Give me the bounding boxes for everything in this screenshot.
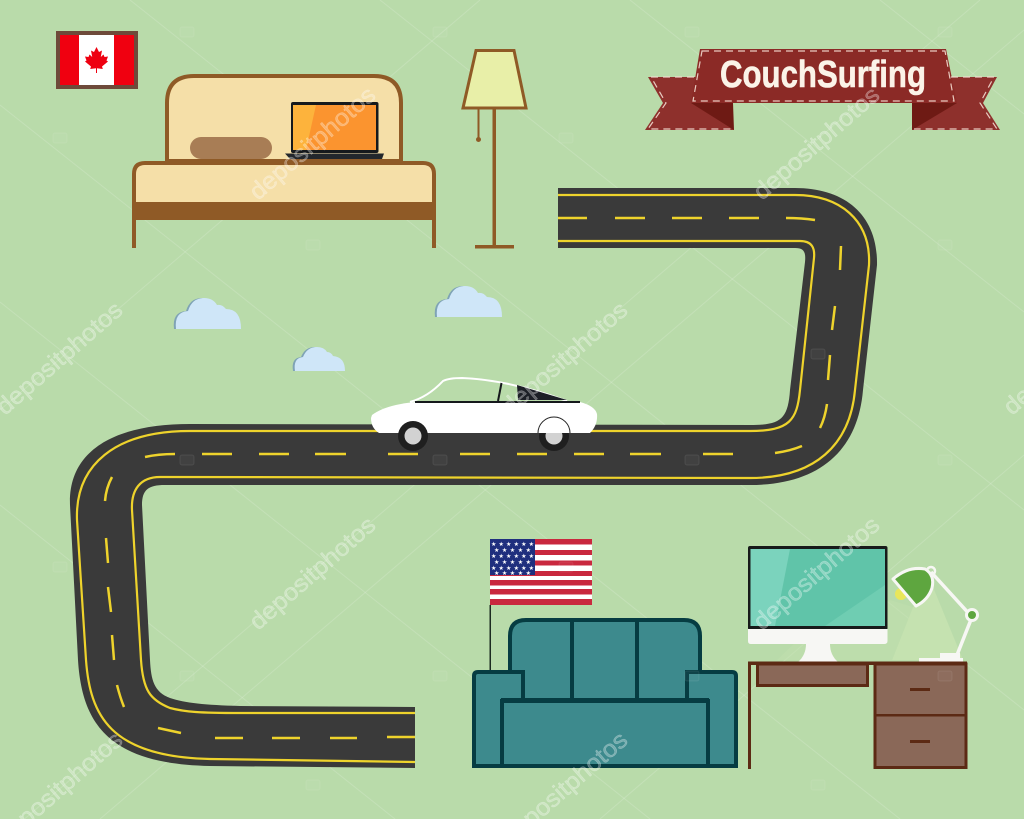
watermarks: depositphotos [244,81,381,206]
cloud right [435,286,502,317]
watermarks: depositphotos [244,511,381,636]
desk top [748,662,967,665]
watermarks: depositphotos [748,511,885,636]
sofa back [510,620,700,700]
flag: USA [490,539,592,671]
light cone [892,587,963,660]
car roof [410,378,567,402]
road [70,188,877,768]
ribbon left tail [645,77,734,130]
car pillar [498,383,502,401]
car rear window [517,385,567,400]
headboard [167,76,401,161]
watermarks: depositphotos [748,81,885,206]
road centre dashes [105,218,841,738]
floor lamp [463,50,526,248]
car rear wheel [539,421,569,451]
bed frame [132,204,436,248]
desk leg [748,665,751,769]
ribbon right tail [912,77,1000,130]
car [371,378,597,451]
icon: maple leaf [85,47,108,73]
mattress [134,163,434,204]
sofa [474,620,736,766]
laptop [285,102,384,159]
flag: USA: ★★★★★ [494,559,531,566]
pillow [190,137,272,159]
watermarks: depositphotos [496,296,633,421]
bed [132,76,436,248]
banner title: CouchSurfing [720,54,926,96]
road surface [70,188,877,768]
ribbon main [691,49,957,103]
flag: USA: ★★★★★★ [491,541,534,548]
road edge line upper [132,195,869,713]
desk lamp [893,567,978,662]
cloud left [174,298,241,329]
car front wheel [398,421,428,451]
sofa left arm [474,672,523,766]
sofa right arm [687,672,736,766]
monitor [748,546,888,662]
banner: CouchSurfing [645,49,1000,130]
flag: USA: ★★★★★ [494,547,531,554]
sofa seat [502,701,708,766]
desk drawer [758,664,868,686]
ribbon folds [691,103,734,130]
desk cabinet [875,664,966,768]
road edge line lower [77,241,814,762]
flag: USA: ★★★★★ [494,570,531,577]
desk [748,662,967,769]
cloud small [293,347,345,371]
flag: USA: ★★★★★★ [491,553,534,560]
car body [371,402,597,433]
flag: Canada [58,33,136,87]
flag: USA: ★★★★★★ [491,565,534,572]
